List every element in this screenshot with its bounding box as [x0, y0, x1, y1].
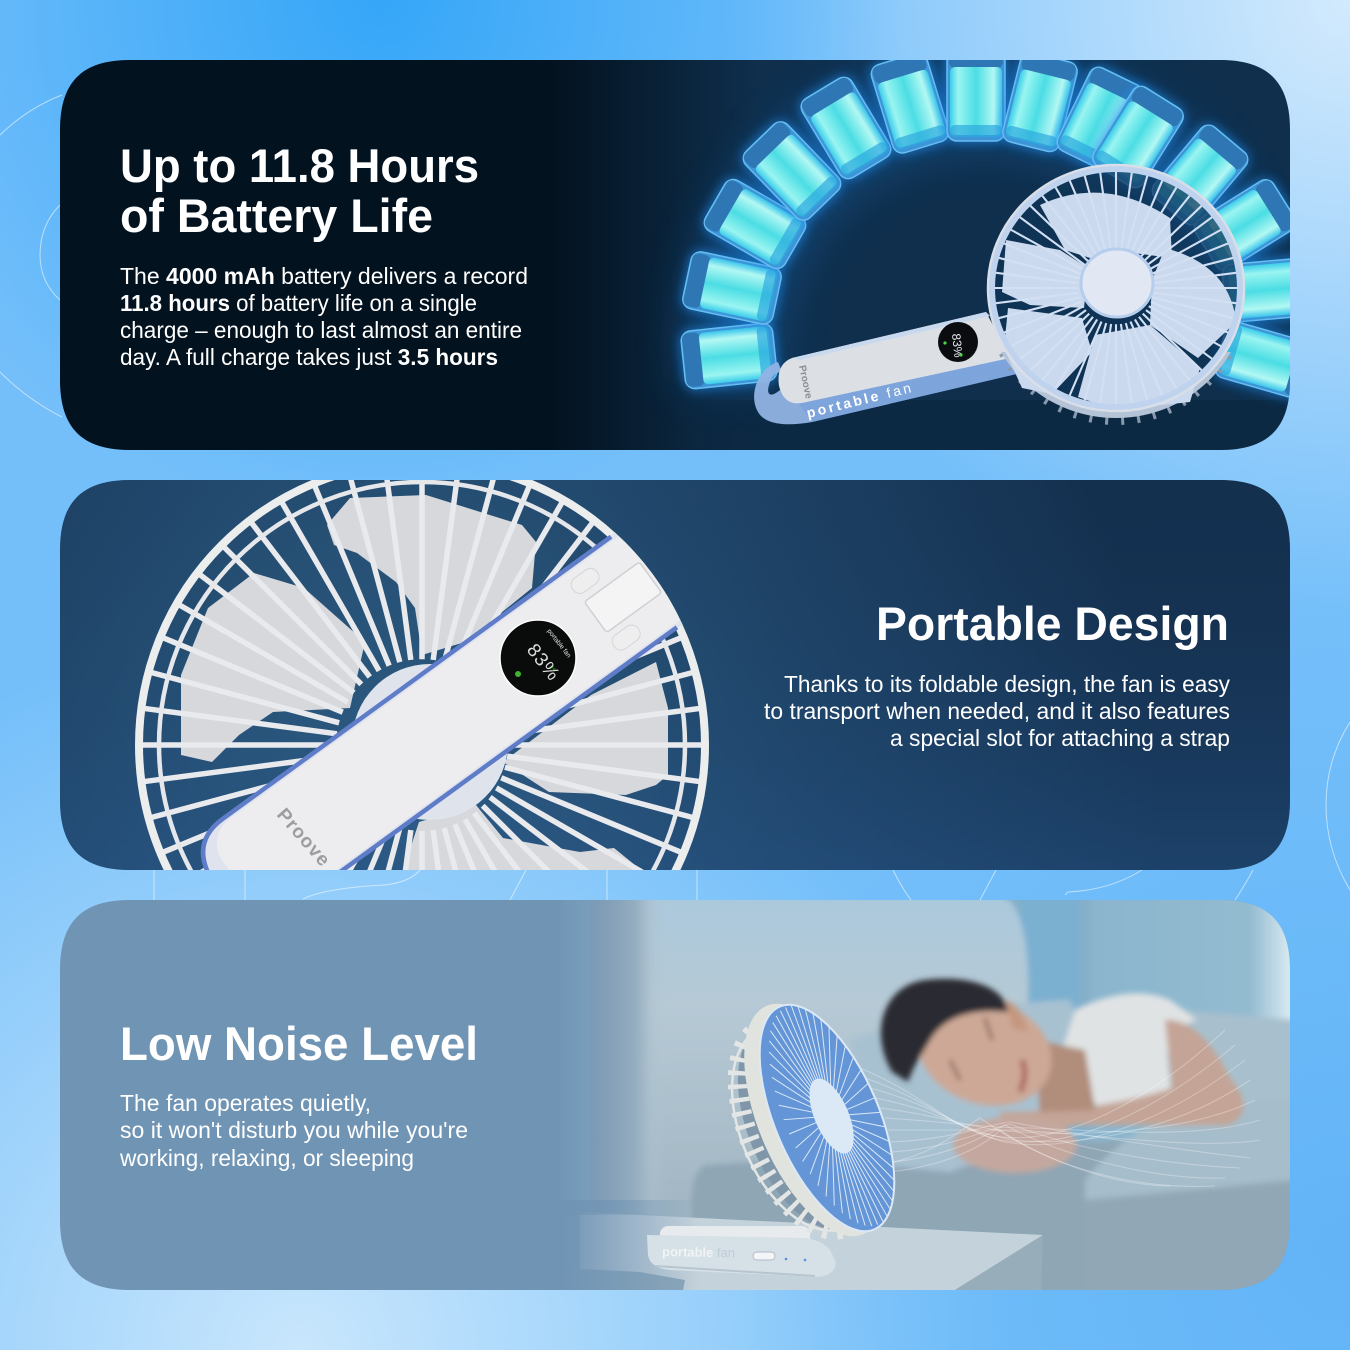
text block: day. A full charge takes just 3.5 hours	[120, 344, 498, 370]
handle	[200, 532, 682, 870]
text block: a special slot for attaching a strap	[890, 725, 1230, 751]
base	[647, 1226, 836, 1277]
pill buttons	[570, 568, 600, 594]
text: portable fan: portable fan	[662, 1244, 735, 1260]
bedroom photo	[545, 895, 1300, 1295]
panel: low noise	[60, 895, 1300, 1295]
heading: Low Noise Level	[120, 1017, 478, 1070]
fan handle and strap	[754, 312, 1025, 424]
air flow lines	[860, 1030, 1260, 1186]
text block: 11.8 hours of battery life on a single	[120, 290, 477, 316]
cream body	[744, 1004, 867, 1236]
slot	[584, 562, 662, 633]
heading: Up to 11.8 Hours	[120, 139, 479, 192]
bedside table	[580, 1214, 1043, 1290]
text block: The fan operates quietly,	[120, 1090, 371, 1116]
cage ribs	[728, 1026, 844, 1240]
display: 83%	[522, 640, 564, 685]
text block: working, relaxing, or sleeping	[119, 1145, 414, 1171]
blue face	[758, 1004, 896, 1232]
fan head	[988, 165, 1244, 421]
text: Proove: Proove	[796, 364, 814, 400]
batteries arc	[679, 48, 1319, 402]
sleeping person	[881, 979, 1244, 1173]
display: H	[548, 666, 556, 673]
text block: charge – enough to last almost an entire	[120, 317, 522, 343]
heading: of Battery Life	[120, 189, 433, 242]
text: Proove: Proove	[272, 805, 334, 871]
fan front view	[135, 480, 709, 870]
panel: battery life	[60, 48, 1319, 450]
text block: The 4000 mAh battery delivers a record	[120, 263, 528, 289]
display	[500, 620, 576, 696]
text block	[120, 263, 528, 370]
fan on table	[647, 1004, 896, 1277]
display: 83%	[949, 333, 965, 359]
display	[938, 322, 978, 362]
text block: Thanks to its foldable design, the fan is easy	[784, 671, 1230, 697]
text block: to transport when needed, and it also features	[764, 698, 1230, 724]
text block	[764, 671, 1230, 751]
heading: Portable Design	[876, 597, 1229, 650]
text: portable fan: portable fan	[805, 380, 913, 421]
heading	[122, 149, 478, 242]
text block	[119, 1090, 468, 1171]
text block: so it won't disturb you while you're	[120, 1117, 468, 1143]
display: portable fan	[545, 628, 572, 660]
panel: portable design	[60, 480, 1290, 870]
